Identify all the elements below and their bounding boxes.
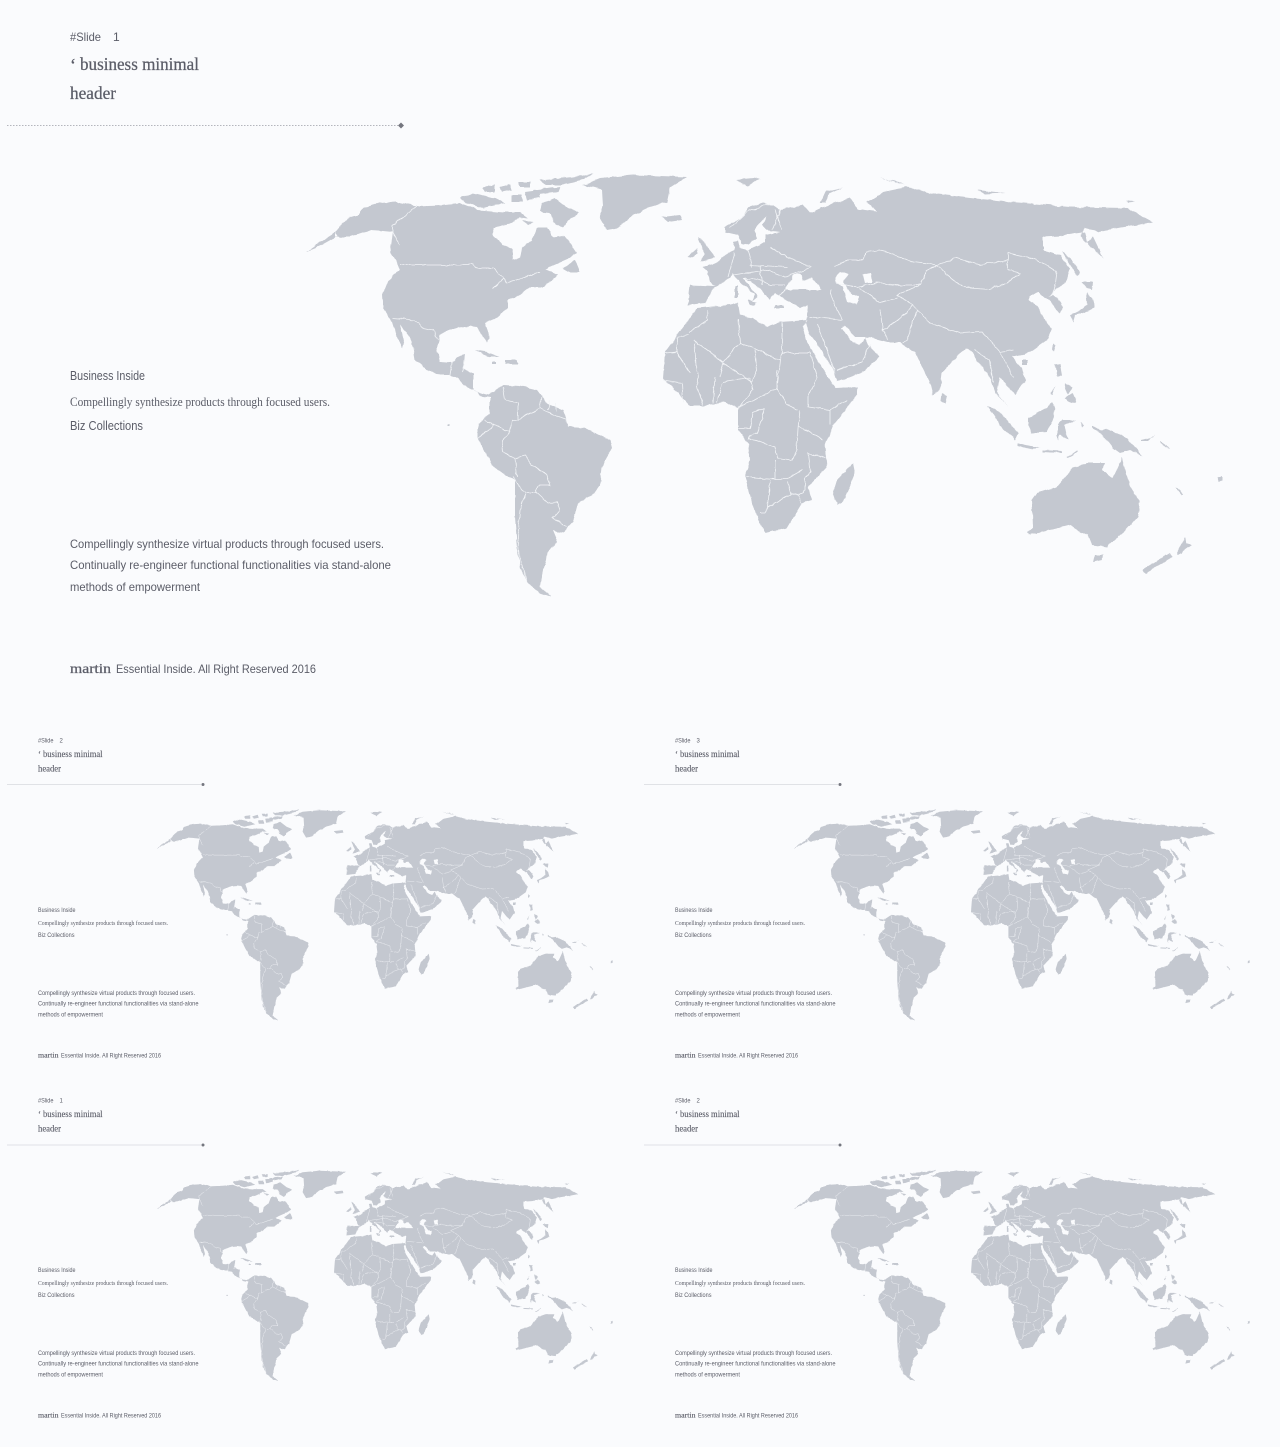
- slide 1: world map: [266, 174, 1222, 597]
- slide 1 repeat: header text: business minimal: [43, 1109, 103, 1119]
- slide 1: heading: header: [70, 83, 116, 103]
- slide 2: body text: Biz Collections: [38, 932, 74, 939]
- slide 2 repeat: body text: Compellingly synthesize products through focused users.: [675, 1280, 805, 1287]
- slide 2 repeat: body text: Compellingly synthesize virtual products through focused users.: [675, 1351, 832, 1357]
- slide 1 repeat: header text: [38, 1098, 103, 1134]
- slide 1: subheading block: Compellingly synthesize products through focused users.: [70, 394, 330, 409]
- slide 1 repeat: header text: header: [38, 1124, 61, 1134]
- slide 3: body text: Compellingly synthesize products through focused users.: [675, 920, 805, 927]
- slide 2 repeat: header text: business minimal: [680, 1109, 740, 1119]
- slide 1 repeat: body text: methods of empowerment: [38, 1372, 103, 1378]
- slide 2 repeat: world map: [773, 1170, 1250, 1381]
- slide 3: header text: #Slide: [675, 738, 691, 744]
- slide 1 repeat: body text: Essential Inside. All Right Reserved 2016: [61, 1414, 162, 1420]
- slide 3: body text: Compellingly synthesize virtual products through focused users.: [675, 991, 832, 997]
- slide 2 repeat thumbnail: [644, 1098, 1250, 1420]
- slide 2 repeat: body text: Essential Inside. All Right Reserved 2016: [698, 1414, 799, 1420]
- slide 2: header text: 2: [60, 738, 64, 744]
- slide 1: heading: [70, 54, 199, 103]
- slide 1: header number: #Slide: [70, 30, 101, 44]
- slide 2 repeat: header text: 2: [696, 1098, 700, 1104]
- slide 3: header text: header: [675, 764, 698, 774]
- slide 2 repeat: body text: Business Inside: [675, 1267, 713, 1274]
- slide 2: header text: business minimal: [43, 749, 103, 759]
- slide 2: body text: Business Inside: [38, 907, 76, 914]
- slide 3: header text: [675, 738, 740, 774]
- slide 2 repeat: header text: ‘: [675, 1110, 678, 1120]
- slide 1: subheading block: Biz Collections: [70, 419, 143, 433]
- slide 3: body text: Business Inside: [675, 907, 713, 914]
- slide 2 repeat: body text: methods of empowerment: [675, 1372, 740, 1378]
- slide 1: heading: business minimal: [80, 54, 199, 74]
- slide 2: body text: Compellingly synthesize virtual products through focused users.: [38, 991, 195, 997]
- slide 1 repeat: body text: Biz Collections: [38, 1292, 74, 1299]
- slide 2 repeat: body text: martin: [675, 1412, 696, 1420]
- slide 1: description paragraph: Continually re-engineer functional functionalities via stand-alone: [70, 558, 391, 572]
- slide 3 thumbnail: [644, 738, 1250, 1060]
- slide 2 repeat: header text: header: [675, 1124, 698, 1134]
- slide 3: body text: [675, 907, 836, 1060]
- slide 1 repeat: body text: Continually re-engineer functional functionalities via stand-alone: [38, 1362, 199, 1368]
- slide 1 repeat: header text: #Slide: [38, 1098, 54, 1104]
- slide 1 repeat: body text: [38, 1267, 199, 1420]
- slide 1: footer: martin: [70, 662, 111, 677]
- slide 3: header text: ‘: [675, 750, 678, 760]
- slide 2: body text: [38, 907, 199, 1060]
- slide 1 repeat thumbnail: [7, 1098, 613, 1420]
- slide 2: world map: [136, 810, 613, 1021]
- slide 3: header text: business minimal: [680, 749, 740, 759]
- slide 1: footer: Essential Inside. All Right Reserved 2016: [116, 662, 316, 676]
- slide 2: body text: martin: [38, 1052, 59, 1060]
- slide 1 repeat: body text: Business Inside: [38, 1267, 76, 1274]
- slide 3: body text: martin: [675, 1052, 696, 1060]
- slide 1: description paragraph: [70, 537, 391, 594]
- slide 1: header number: [70, 30, 120, 44]
- slide 1: description paragraph: Compellingly synthesize virtual products through focused users.: [70, 537, 384, 551]
- slide 1: header number: 1: [113, 30, 120, 44]
- slide 1: divider with diamond: [7, 122, 404, 128]
- slide 2 repeat: body text: [675, 1267, 836, 1420]
- slide 2 repeat: header text: [675, 1098, 740, 1134]
- slide 3: header text: 3: [696, 738, 700, 744]
- slide 2: header text: header: [38, 764, 61, 774]
- slide 3: body text: Biz Collections: [675, 932, 712, 939]
- slide 1: subheading block: Business Inside: [70, 369, 145, 383]
- slide 2: body text: Essential Inside. All Right Reserved 2016: [61, 1054, 162, 1060]
- slide 2: divider: [7, 783, 204, 786]
- slide 2 repeat: body text: Biz Collections: [675, 1292, 712, 1299]
- slide 3: body text: methods of empowerment: [675, 1012, 740, 1018]
- slide 3: body text: Continually re-engineer functional functionalities via stand-alone: [675, 1002, 836, 1008]
- slide 3: divider: [644, 783, 842, 786]
- slide 2: body text: Continually re-engineer functional functionalities via stand-alone: [38, 1002, 199, 1008]
- slide 3: body text: Essential Inside. All Right Reserved 2016: [698, 1054, 799, 1060]
- slide 1 repeat: header text: 1: [60, 1098, 64, 1104]
- slide 2: body text: Compellingly synthesize products through focused users.: [38, 920, 168, 927]
- slide 1: heading: ‘: [70, 55, 76, 75]
- slide 1 repeat: body text: Compellingly synthesize products through focused users.: [38, 1280, 168, 1287]
- slide 2: header text: [38, 738, 103, 774]
- slide 1: description paragraph: methods of empowerment: [70, 580, 201, 594]
- slide 3: world map: [773, 810, 1250, 1021]
- slide 2 thumbnail: [7, 738, 613, 1060]
- slide 2 repeat: header text: #Slide: [675, 1098, 691, 1104]
- slide 1 repeat: body text: Compellingly synthesize virtual products through focused users.: [38, 1351, 195, 1357]
- slide 2 repeat: divider: [644, 1144, 842, 1146]
- slide 2 repeat: body text: Continually re-engineer functional functionalities via stand-alone: [675, 1362, 836, 1368]
- slide 1 repeat: divider: [7, 1144, 204, 1146]
- slide 1 repeat: header text: ‘: [38, 1110, 41, 1120]
- slide 1: subheading block: [70, 369, 330, 433]
- slide 1 repeat: body text: martin: [38, 1412, 59, 1420]
- slide 1 repeat: world map: [136, 1170, 613, 1381]
- slide 2: header text: ‘: [38, 750, 41, 760]
- slide 2: body text: methods of empowerment: [38, 1012, 103, 1018]
- slide 2: header text: #Slide: [38, 738, 54, 744]
